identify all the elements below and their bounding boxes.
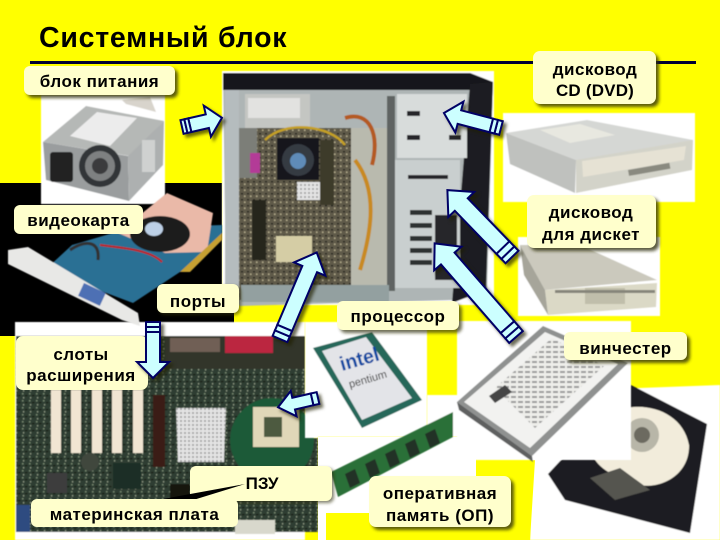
photo: processor: pentium [348, 369, 388, 391]
arrow: motherboard to case [264, 246, 332, 346]
callout: video card [14, 205, 143, 234]
callout: motherboard [31, 499, 238, 527]
photo: CD drive [503, 113, 695, 202]
callout: RAM [369, 476, 514, 530]
arrow: power supply to case [178, 102, 226, 143]
photo: RAM module [331, 395, 476, 497]
callout: processor [337, 301, 462, 333]
photo: video card [8, 193, 222, 326]
callout: power supply [24, 66, 178, 98]
title: Системный блок [39, 22, 287, 54]
callout: hard drive: винчестер [579, 339, 672, 358]
photo: processor: intel [337, 344, 382, 376]
callout: ports: порты [170, 292, 226, 311]
black photo background [0, 183, 234, 336]
photo: motherboard [15, 322, 318, 540]
callout: hard drive [564, 332, 690, 363]
arrow: CD drive to case [440, 98, 505, 143]
callout: CD drive: дисковод [553, 60, 637, 79]
yellow gap between photos [476, 460, 535, 540]
photo: computer case [222, 71, 494, 306]
callout: expansion slots: расширения [26, 366, 136, 385]
title rule [30, 61, 696, 64]
callout: ports [157, 284, 241, 315]
photo: processor [305, 322, 427, 438]
arrow: processor to socket [275, 385, 321, 420]
callout: CD drive: CD (DVD) [556, 81, 634, 100]
callout: expansion slots [16, 336, 148, 390]
arrow: video card to slots [137, 322, 169, 378]
callout: ROM [152, 466, 334, 503]
callout: video card: видеокарта [27, 211, 130, 230]
callout: floppy drive: дисковод [549, 203, 633, 222]
photo: notebook hard drive [457, 321, 631, 462]
callout: CD drive [533, 51, 659, 107]
callout: floppy drive [527, 195, 659, 251]
photo: floppy drive [518, 237, 660, 316]
callout: expansion slots: слоты [53, 345, 109, 364]
arrow: floppy drive to case [434, 178, 525, 270]
callout: processor: процессор [351, 307, 445, 326]
photo: power supply [41, 95, 165, 204]
callout: floppy drive: для дискет [542, 225, 640, 244]
callout: RAM: оперативная [383, 484, 497, 503]
callout: ROM: ПЗУ [246, 474, 279, 493]
callout: RAM: память (ОП) [386, 506, 494, 525]
callout: power supply: блок питания [40, 72, 159, 91]
arrow: hard drive to case [421, 232, 530, 349]
white backing below processor and RAM [318, 437, 476, 540]
photo: large hard drive open [530, 385, 720, 540]
callout: motherboard: материнская плата [50, 505, 219, 524]
